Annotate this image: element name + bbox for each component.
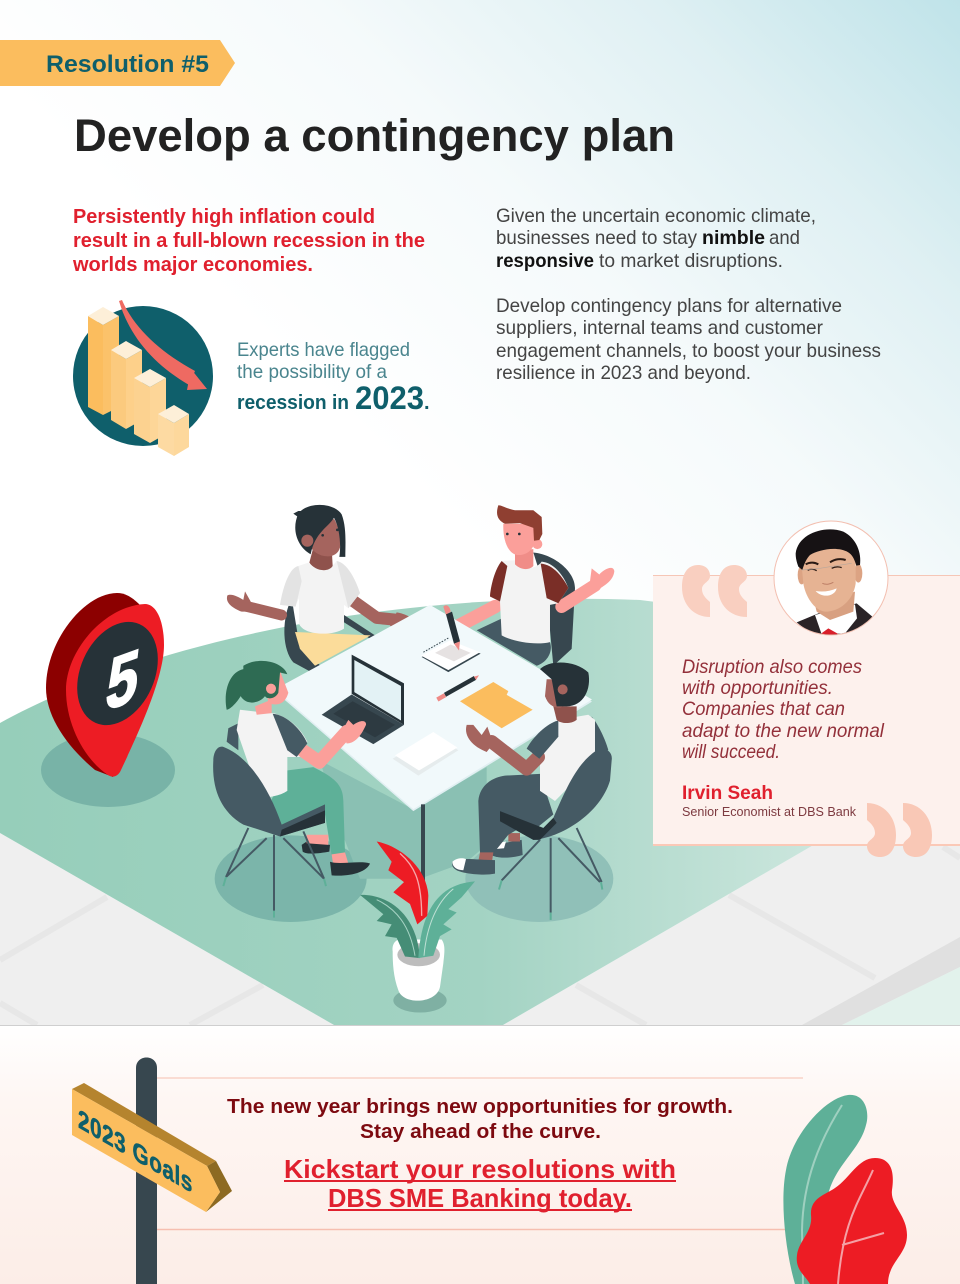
quote text <box>682 657 885 763</box>
pen on table <box>437 675 479 700</box>
icon: map pin number 5 <box>41 593 175 807</box>
call to action link text: DBS SME Banking today. <box>328 1183 632 1213</box>
papers <box>393 732 458 776</box>
body copy: to market disruptions. <box>599 250 783 272</box>
body copy: nimble <box>702 227 765 249</box>
resolution banner: Resolution #5 <box>46 51 209 78</box>
footer message <box>227 1096 733 1143</box>
callout: recession in 2023: Experts have flagged <box>237 339 410 361</box>
plant in white pot <box>360 842 475 1013</box>
speaker role: Senior Economist at DBS Bank <box>682 804 856 819</box>
body copy: businesses need to stay <box>496 227 697 249</box>
icon: map pin number 5: 5 <box>102 633 143 727</box>
body copy: responsive <box>496 250 594 272</box>
person: man bottom right <box>452 662 612 920</box>
callout: recession in 2023: the possibility of a <box>237 361 387 383</box>
footer message: The new year brings new opportunities for growth. <box>227 1096 733 1118</box>
quote text: will succeed. <box>682 742 780 763</box>
person: woman bottom left <box>213 661 370 918</box>
callout: recession in 2023: recession in <box>237 392 349 414</box>
pencil in hand <box>443 605 460 651</box>
body copy: resilience in 2023 and beyond. <box>496 362 751 384</box>
body copy: Given the uncertain economic climate, <box>496 205 816 227</box>
table top <box>275 605 592 889</box>
portrait: Irvin Seah <box>774 521 888 640</box>
signpost with 2023 Goals: 2023 Goals <box>78 1104 192 1199</box>
decorative leaves <box>783 1095 907 1284</box>
call to action link text <box>284 1154 676 1213</box>
icon: closing quote marks <box>867 803 932 857</box>
laptop <box>322 655 404 744</box>
red intro statement: result in a full-blown recession in the <box>73 230 425 252</box>
body copy: and <box>769 227 800 249</box>
panel: expert quote <box>653 521 960 857</box>
icon: opening quote marks <box>682 565 747 617</box>
callout: recession in 2023 <box>237 339 430 416</box>
floor and green rug <box>0 599 960 1025</box>
body copy: Develop contingency plans for alternative <box>496 295 842 317</box>
icon: falling bar chart <box>73 300 213 456</box>
footer message: Stay ahead of the curve. <box>360 1121 601 1143</box>
body copy <box>496 205 881 384</box>
person: man top right <box>447 505 614 666</box>
red intro statement: worlds major economies. <box>72 254 313 276</box>
signpost with 2023 Goals <box>72 1058 232 1284</box>
quote text: with opportunities. <box>682 678 833 699</box>
illustration: team meeting around a table <box>213 505 614 1013</box>
chair shadows <box>215 760 613 922</box>
speaker name: Irvin Seah <box>682 783 773 804</box>
body copy: engagement channels, to boost your business <box>496 340 881 362</box>
folder <box>460 682 533 728</box>
quote text: Companies that can <box>682 699 845 720</box>
callout: recession in 2023: . <box>424 392 430 414</box>
quote text: adapt to the new normal <box>682 721 885 742</box>
quote text: Disruption also comes <box>682 657 862 678</box>
notebook <box>421 638 481 672</box>
panel: footer call to action <box>0 1025 960 1284</box>
callout: recession in 2023: 2023 <box>355 380 424 416</box>
title: Develop a contingency plan <box>74 110 675 161</box>
body copy: suppliers, internal teams and customer <box>496 317 823 339</box>
red intro statement: Persistently high inflation could <box>73 206 375 228</box>
red intro statement <box>72 206 425 276</box>
person: woman top left <box>227 505 415 673</box>
call to action link text: Kickstart your resolutions with <box>284 1154 676 1184</box>
resolution banner <box>0 40 235 86</box>
